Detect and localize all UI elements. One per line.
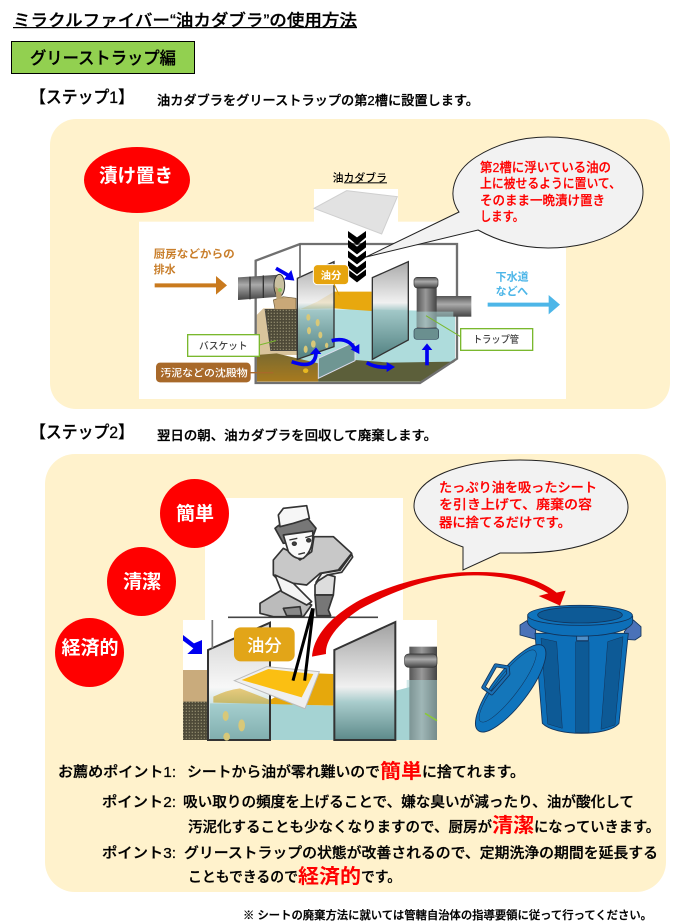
icon: blue bin: [465, 605, 641, 741]
illustration: tank cross-section: 油分: [247, 635, 282, 655]
step 1 heading: 油カダブラをグリーストラップの第2槽に設置します。: [157, 93, 479, 108]
diagram labels: 油分: [321, 269, 342, 282]
callout: step 1: します。: [480, 209, 524, 224]
point 1: シートから油が零れ難いので: [187, 763, 380, 781]
diagram: trap tank: [238, 244, 471, 383]
label: sludge: [250, 371, 273, 375]
label and arrow: outflow: 下水道: [496, 269, 529, 283]
recommendation text: [58, 760, 660, 888]
point 1: に捨てれます。: [422, 764, 525, 781]
label: oil: [313, 265, 349, 285]
point 3: 経済的: [298, 865, 361, 888]
diagram labels: 汚泥などの沈殿物: [160, 367, 248, 380]
badge: soak: 漬け置き: [99, 165, 173, 187]
point 2: 吸い取りの頻度を上げることで、嫌な臭いが減ったり、油が酸化して: [183, 793, 634, 811]
point 3: ポイント3:: [102, 845, 176, 862]
point 2: 清潔: [492, 814, 534, 837]
callout: step 1: そのまま一晩漬け置き: [480, 193, 605, 208]
point 2: になっていきます。: [534, 819, 660, 836]
illustration: tank cross-section: [183, 498, 437, 741]
label: trap pipe: [426, 316, 461, 337]
panel: step 2: [45, 454, 666, 892]
soaked sheet: [234, 667, 319, 709]
badge: economical: [55, 618, 124, 687]
label and arrow: inflow: 厨房などからの: [154, 246, 235, 260]
point 1: お薦めポイント1:: [58, 764, 176, 781]
section label: grease trap: [12, 42, 194, 74]
arrow: curved red: [312, 572, 566, 657]
panel: step 1: [50, 119, 670, 409]
trap pipe: [433, 296, 471, 317]
callout: step 1: [366, 137, 643, 257]
section label: grease trap: グリーストラップ編: [30, 49, 176, 68]
badge: soak: [84, 147, 190, 213]
point 2: 汚泥化することも少なくなりますので、厨房が: [188, 818, 492, 836]
callout: step 2: を引き上げて、廃棄の容: [439, 497, 592, 512]
step 2 heading: 翌日の朝、油カダブラを回収して廃棄します。: [157, 428, 437, 443]
badge: economical: 経済的: [61, 637, 119, 659]
callout: step 1: 上に被せるように置いて、: [480, 176, 621, 191]
diagram labels: [154, 231, 560, 382]
callout: step 2: 器に捨てるだけです。: [439, 515, 571, 530]
diagram labels: などへ: [496, 284, 528, 298]
step 1 heading: [30, 88, 479, 108]
label: sheet name: 油カダブラ: [333, 170, 387, 184]
point 2: ポイント2:: [102, 794, 176, 811]
point 2: [102, 793, 660, 837]
point 3: です。: [361, 869, 401, 886]
oil bubbles: [303, 314, 328, 373]
callout: step 1: 第2槽に浮いている油の: [480, 160, 611, 175]
point 3: グリーストラップの状態が改善されるので、定期洗浄の期間を延長する: [184, 844, 658, 862]
point 3: こともできるので: [188, 869, 298, 886]
badge: simple: [160, 479, 229, 548]
icon: downward chevrons: [348, 231, 366, 282]
step 2 heading: [30, 423, 437, 443]
badge: clean: [107, 547, 176, 616]
tongs: [293, 608, 313, 681]
label: oil: [234, 627, 295, 661]
badge: clean: 清潔: [123, 571, 161, 593]
diagram labels: トラップ管: [473, 333, 519, 346]
blue flow arrows: [276, 268, 427, 367]
icon: absorbent sheet: [314, 191, 397, 234]
label: basket: [259, 341, 276, 345]
inlet pipe: [238, 275, 280, 300]
callout: step 2: たっぷり油を吸ったシート: [439, 480, 597, 495]
step 1 heading: 【ステップ1】: [30, 88, 134, 107]
callout: step 2: [414, 460, 628, 570]
diagram labels: バスケット: [199, 341, 248, 353]
point 1: [58, 760, 525, 783]
badge: simple: 簡単: [176, 502, 214, 525]
title: ミラクルファイバー“油カダブラ”の使用方法: [13, 10, 358, 30]
diagram backing: [139, 170, 566, 399]
point 3: [102, 844, 658, 888]
illustration: worker: [228, 506, 378, 617]
diagram labels: 排水: [154, 262, 176, 276]
point 1: 簡単: [380, 760, 422, 783]
step 2 heading: 【ステップ2】: [30, 423, 134, 442]
